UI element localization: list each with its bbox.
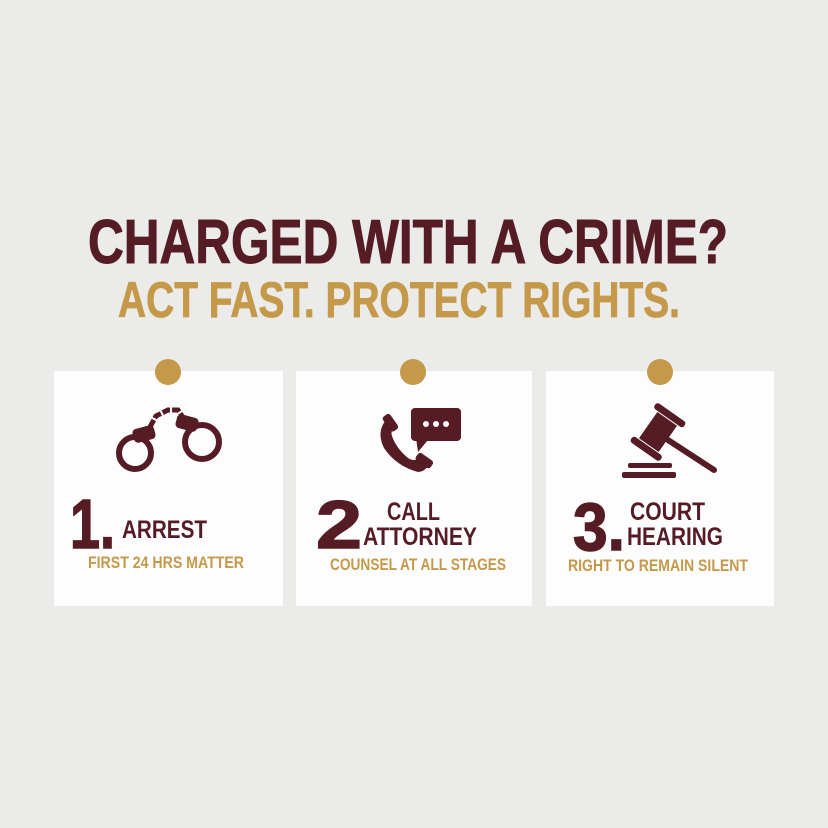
heading: court hearing: COURT — [630, 498, 705, 526]
panel: arrest — [54, 359, 283, 606]
heading: arrest: ARREST — [122, 516, 207, 544]
heading: call attorney: CALL — [387, 498, 440, 526]
text: first 24 hrs: FIRST 24 HRS MATTER — [88, 553, 244, 572]
panel: court hearing — [546, 359, 774, 606]
icon: gavel — [622, 402, 714, 478]
text: counsel: COUNSEL AT ALL STAGES — [330, 555, 506, 574]
number 1: 1. — [70, 485, 115, 563]
number 3: 3. — [573, 489, 625, 565]
icon: handcuffs — [119, 410, 219, 469]
panel: call attorney — [296, 359, 532, 606]
pin — [155, 359, 181, 385]
text: right to remain silent: RIGHT TO REMAIN SILENT — [568, 556, 749, 575]
icon: phone with chat bubble — [380, 408, 461, 472]
panel: court hearing: HEARING — [627, 523, 723, 551]
number 2: 2 — [316, 487, 362, 563]
subtitle: ACT FAST. PROTECT RIGHTS. — [118, 272, 680, 328]
panel: call attorney: ATTORNEY — [363, 523, 477, 551]
pin — [647, 359, 673, 385]
pin — [400, 359, 426, 385]
